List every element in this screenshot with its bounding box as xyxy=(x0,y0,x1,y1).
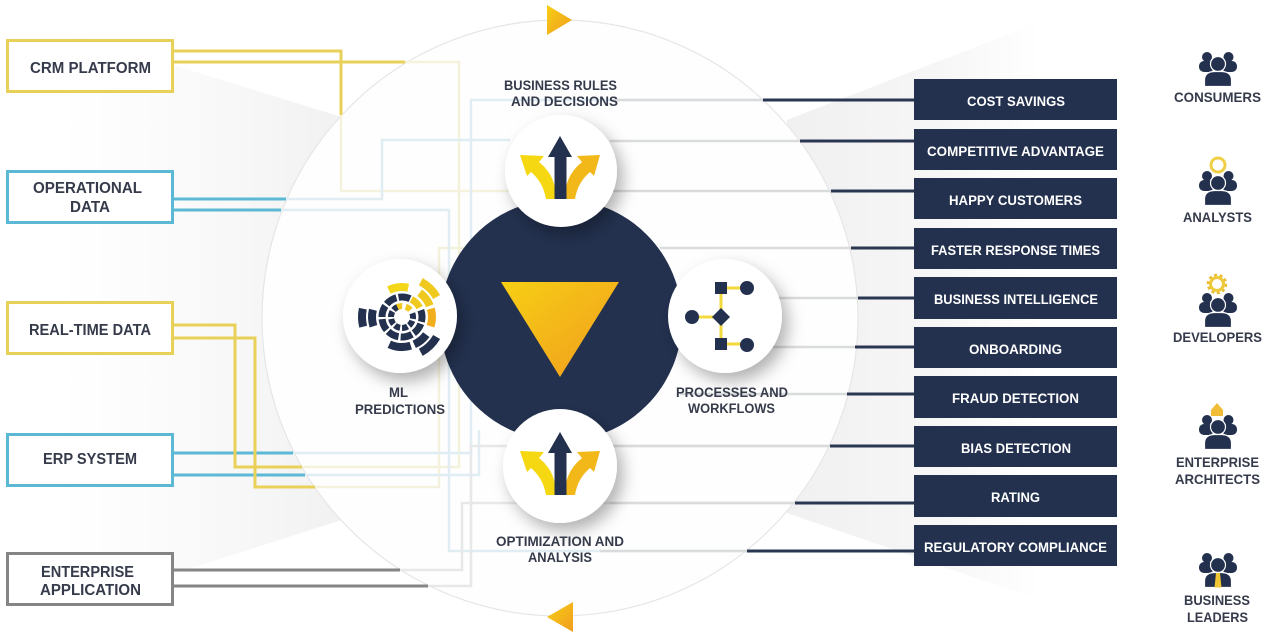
input box: operational data xyxy=(8,172,172,222)
heading: business rules xyxy=(504,78,618,109)
audience: developers: DEVELOPERS xyxy=(1173,329,1262,345)
output box: bias detection: BIAS DETECTION xyxy=(961,441,1071,456)
solid input connector lines xyxy=(172,51,428,586)
arrow: bottom of cycle xyxy=(547,602,573,632)
output box: happy customers: HAPPY CUSTOMERS xyxy=(949,193,1082,208)
output box: regulatory compliance: REGULATORY COMPLIANCE xyxy=(924,540,1107,555)
heading: business rules: AND DECISIONS xyxy=(511,94,618,109)
output box: faster response times xyxy=(914,228,1117,269)
audience: analysts xyxy=(1183,158,1252,225)
input box: ERP system xyxy=(8,434,172,486)
icon: people xyxy=(1199,52,1237,86)
heading: ML predictions: ML xyxy=(389,385,408,400)
input box: enterprise application: APPLICATION xyxy=(40,582,141,599)
node: optimization circle xyxy=(503,409,617,523)
right gray backdrop xyxy=(787,22,1040,600)
icon: split arrows xyxy=(520,432,600,495)
audience: consumers xyxy=(1174,52,1261,105)
output box: faster response times: FASTER RESPONSE TIMES xyxy=(931,243,1100,258)
output box: fraud detection: FRAUD DETECTION xyxy=(952,391,1079,406)
left gray backdrop xyxy=(60,30,345,610)
faded connector lines xyxy=(281,62,858,586)
audience: business leaders xyxy=(1184,553,1250,625)
heading: processes and workflows xyxy=(676,385,788,416)
output box: cost savings: COST SAVINGS xyxy=(967,94,1065,109)
output box: cost savings xyxy=(914,79,1117,120)
input box: real-time data: REAL-TIME DATA xyxy=(29,322,151,339)
heading: optimization and analysis xyxy=(496,534,624,565)
icon: building cap xyxy=(1211,403,1223,416)
heading: business rules: BUSINESS RULES xyxy=(504,78,617,93)
audience: enterprise architects: ARCHITECTS xyxy=(1175,471,1260,487)
central triangle xyxy=(501,282,619,377)
output box: fraud detection xyxy=(914,376,1117,418)
solid output connector lines xyxy=(747,100,914,551)
audience: analysts: ANALYSTS xyxy=(1183,209,1252,225)
input box: operational data: OPERATIONAL xyxy=(33,180,142,197)
icon: ring xyxy=(1211,158,1225,172)
heading: processes and workflows: WORKFLOWS xyxy=(688,401,775,416)
output box: competitive advantage: COMPETITIVE ADVANTAGE xyxy=(927,144,1104,159)
icon: workflow diagram xyxy=(685,281,754,352)
input box: operational data: DATA xyxy=(70,199,110,216)
input box: CRM platform xyxy=(8,40,172,92)
arrow: top of cycle xyxy=(547,5,572,35)
output box: rating: RATING xyxy=(991,490,1040,505)
output box: business intelligence xyxy=(914,277,1117,319)
output box: competitive advantage xyxy=(914,129,1117,170)
output box: onboarding xyxy=(914,327,1117,368)
node: business rules circle xyxy=(505,115,617,227)
output box: business intelligence: BUSINESS INTELLIGENCE xyxy=(934,292,1098,307)
icon: people with tie xyxy=(1199,553,1237,588)
audience: business leaders: BUSINESS xyxy=(1184,592,1250,608)
output box: rating xyxy=(914,475,1117,517)
node: processes circle xyxy=(668,259,782,373)
input box: enterprise application xyxy=(8,554,172,604)
output box: happy customers xyxy=(914,178,1117,219)
heading: optimization and analysis: ANALYSIS xyxy=(528,550,592,565)
icon: split arrows xyxy=(520,136,600,199)
icon: radial segments xyxy=(347,262,457,372)
audience: developers xyxy=(1173,275,1262,345)
icon: people xyxy=(1199,171,1237,206)
heading: processes and workflows: PROCESSES AND xyxy=(676,385,788,400)
heading: ML predictions: PREDICTIONS xyxy=(355,402,445,417)
output box: onboarding: ONBOARDING xyxy=(969,342,1062,357)
input box: CRM platform: CRM PLATFORM xyxy=(30,60,151,77)
audience: enterprise architects: ENTERPRISE xyxy=(1176,454,1259,470)
node: ML predictions circle xyxy=(343,259,457,373)
icon: people xyxy=(1199,293,1237,328)
output box: bias detection xyxy=(914,426,1117,467)
heading: optimization and analysis: OPTIMIZATION AND xyxy=(496,534,624,549)
icon: gear xyxy=(1208,275,1226,293)
central navy circle xyxy=(440,199,682,441)
audience: consumers: CONSUMERS xyxy=(1174,89,1261,105)
audience: business leaders: LEADERS xyxy=(1187,609,1248,625)
input box: real-time data xyxy=(8,302,172,354)
large central circle xyxy=(262,20,858,616)
icon: people xyxy=(1199,415,1237,450)
heading: ML predictions xyxy=(355,385,445,417)
input box: ERP system: ERP SYSTEM xyxy=(43,451,137,468)
output box: regulatory compliance xyxy=(914,525,1117,566)
audience: enterprise architects xyxy=(1175,403,1260,487)
input box: enterprise application: ENTERPRISE xyxy=(41,564,134,581)
